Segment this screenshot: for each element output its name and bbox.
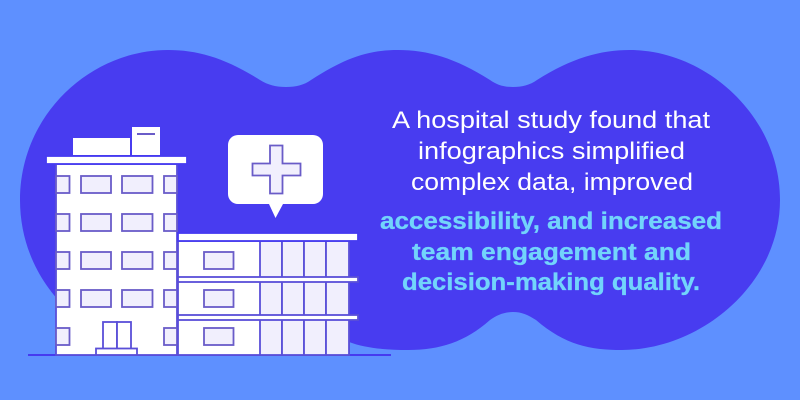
bubble [228, 135, 323, 218]
main tower [56, 164, 177, 355]
wing slabs [178, 233, 358, 320]
text block: study finding: complex data, improved [411, 169, 693, 196]
icon: speech bubble with medical cross [228, 135, 323, 218]
entrance door [96, 322, 137, 355]
tower windows [56, 176, 177, 345]
text block: study finding [392, 107, 710, 196]
medical cross [252, 146, 300, 194]
icon: hospital building [28, 127, 391, 355]
side wing [178, 241, 349, 355]
text block: study finding: A hospital study found that [392, 107, 710, 134]
text block: highlighted outcome: decision-making quality. [402, 269, 700, 296]
ground line [28, 354, 391, 356]
text block: study finding: infographics simplified [418, 138, 685, 165]
roof units [73, 127, 160, 155]
roof slab [46, 156, 187, 164]
text block: highlighted outcome: team engagement and [412, 239, 691, 266]
text block: highlighted outcome: accessibility, and increased [380, 208, 722, 235]
background blob [20, 50, 780, 350]
text block: highlighted outcome [380, 208, 722, 296]
wing windows [204, 252, 234, 345]
wing glass panels [260, 241, 349, 355]
